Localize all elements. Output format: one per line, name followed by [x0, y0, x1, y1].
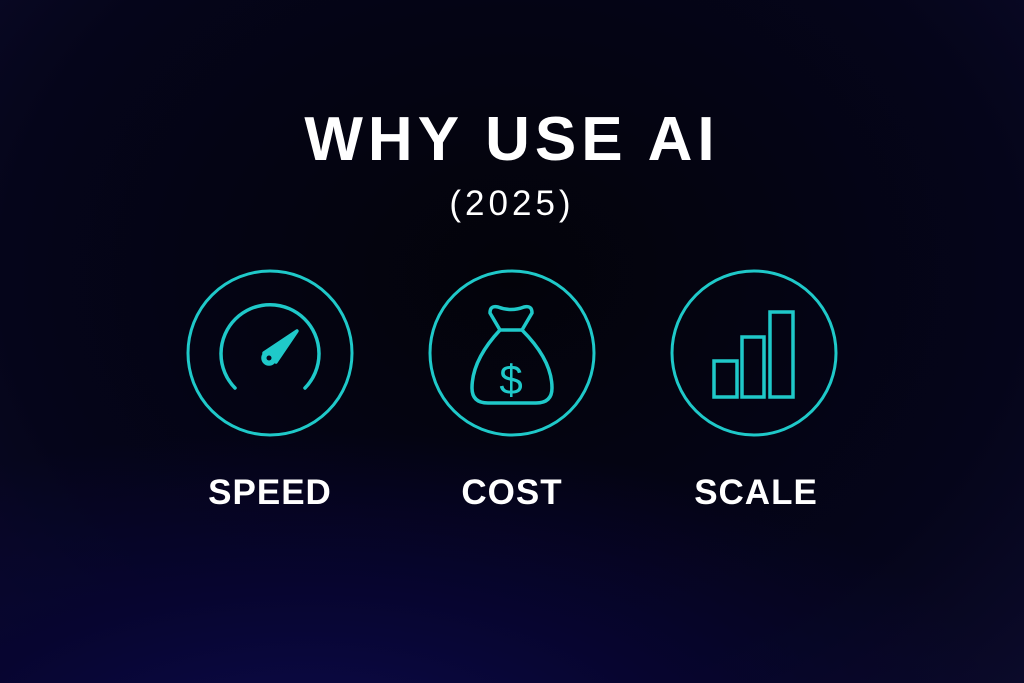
label: speed: SPEED	[208, 473, 332, 512]
label: cost: COST	[461, 473, 563, 512]
icon: speed gauge	[188, 271, 352, 435]
icon: money bag: $	[499, 356, 523, 403]
icon: bar chart	[672, 271, 836, 435]
subtitle: (2025)	[449, 184, 575, 223]
label: scale: SCALE	[694, 473, 818, 512]
title: WHY USE AI	[304, 105, 720, 174]
icon: money bag	[430, 271, 594, 435]
